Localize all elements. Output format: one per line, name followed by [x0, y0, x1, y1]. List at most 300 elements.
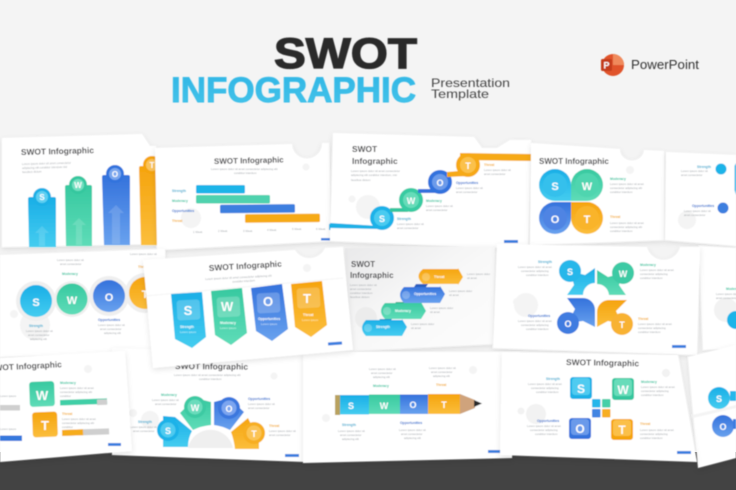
button — [321, 238, 330, 240]
text T with bar: curabitur — [62, 425, 73, 429]
slide: list circles (bottom right) — [688, 345, 736, 468]
slide: far right panel — [699, 246, 736, 350]
arrow Moderacy: sit amet — [430, 310, 440, 314]
bar T: T — [150, 161, 155, 170]
slide: gray arrow steps — [345, 246, 495, 351]
petal T: T — [584, 214, 591, 226]
timeline bars — [196, 185, 320, 223]
slide description: Lorem ipsum dolor sit amet consectetur adipiscing elit — [174, 373, 241, 377]
subtitle: Presentation Template: Template — [431, 87, 489, 101]
center small squares — [592, 399, 610, 418]
subtitle: Presentation Template — [431, 76, 510, 101]
bottom captions: amet consectetur — [401, 432, 423, 436]
slide description: faucibus dictum — [351, 178, 371, 182]
captions: Lorem ipsum dolor sit — [269, 429, 296, 433]
slide description: Lorem ipsum dolor sit — [350, 283, 377, 287]
button — [285, 454, 299, 457]
slide description: Lorem ipsum dolor sit amet consectetur adipiscing elit — [205, 274, 272, 281]
text T with bar — [62, 412, 109, 436]
square T — [32, 412, 58, 437]
top captions: amet consectetur — [431, 370, 453, 374]
captions: Lorem ipsum dolor sit amet — [518, 319, 552, 323]
captions: consectetur adipiscing — [521, 269, 549, 273]
banner S: Lorem ipsum — [180, 330, 197, 334]
connector orange-blue — [408, 284, 428, 296]
labels: Lorem ipsum dolor sit — [484, 168, 511, 172]
text W with bar — [60, 381, 107, 405]
segment O — [400, 394, 428, 414]
arrow Moderacy: Lorem ipsum dolor — [430, 306, 453, 310]
captions: Opportunities — [248, 397, 270, 401]
logo: PowerPoint: PowerPoint — [631, 58, 700, 72]
captions: consectetur adipiscing — [638, 326, 666, 330]
labels — [397, 163, 511, 230]
fan O: O — [225, 404, 233, 414]
bar W: W — [74, 181, 82, 190]
bottom captions: Lorem ipsum dolor sit — [98, 323, 125, 327]
pencil graphic — [335, 394, 482, 415]
captions: curabitur interdum — [536, 390, 559, 394]
ribbon S — [330, 206, 394, 230]
top captions — [57, 252, 157, 276]
slide: puzzle squares — [500, 352, 697, 462]
slide description: Lorem ipsum dolor sit amet consectetur — [22, 161, 71, 166]
bottom captions: adipiscing elit — [30, 337, 47, 341]
piece S: S — [567, 267, 573, 277]
title: SWOT: SWOT — [274, 30, 417, 78]
square O: O — [575, 422, 585, 436]
petal labels: Threat — [610, 215, 621, 219]
timeline ticks: 1 Week — [193, 230, 203, 234]
top captions: adipiscing elit — [373, 375, 390, 379]
captions: consectetur adipiscing — [530, 428, 558, 432]
banner T: Lorem ipsum — [302, 318, 319, 322]
logo: PowerPoint: P — [604, 60, 610, 70]
top captions: Threat — [436, 383, 447, 387]
labels: amet consectetur — [456, 190, 478, 194]
piece T — [597, 300, 633, 335]
bar S — [28, 188, 56, 247]
captions: Lorem ipsum dolor sit amet — [528, 382, 562, 386]
slide description: curabitur interdum — [234, 171, 257, 175]
connector green-cyan — [372, 319, 392, 330]
labels: Strength — [397, 217, 411, 221]
top captions — [369, 366, 456, 388]
captions: consectetur adipiscing — [641, 389, 669, 393]
slide: bars chart (top left) — [2, 134, 161, 247]
arrow Opportunities: Lorem ipsum dolor — [449, 289, 472, 293]
petal labels: curabitur interdum — [610, 190, 633, 194]
timeline ticks: 3 Week — [243, 229, 253, 233]
slide description: Lorem ipsum dolor sit amet consectetur — [351, 169, 400, 173]
caption Moderacy — [716, 287, 736, 300]
captions: consectetur adipiscing — [640, 272, 668, 276]
title: INFOGRAPHIC: INFOGRAPHIC — [171, 71, 416, 110]
bottom captions: adipiscing elit — [104, 331, 121, 335]
bottom captions: amet consectetur — [28, 333, 50, 337]
captions: Threat — [269, 424, 280, 428]
slide description — [211, 167, 278, 175]
banner W: Moderacy — [220, 321, 236, 325]
arrow Strength: Strength — [376, 325, 390, 329]
slide: circles row — [0, 249, 165, 357]
slide description — [350, 283, 377, 299]
circle S: S — [716, 394, 722, 404]
banner S: Strength — [180, 325, 194, 329]
piece T: T — [619, 320, 625, 330]
text T with bar: Threat — [62, 412, 73, 416]
ribbon O: O — [436, 178, 444, 188]
pencil graphic: W — [380, 401, 389, 411]
slide description: curabitur interdum — [350, 291, 373, 295]
arrow Strength — [362, 319, 434, 336]
captions: Lorem ipsum dolor sit amet — [518, 265, 552, 269]
pencil graphic: T — [441, 400, 447, 410]
captions — [527, 377, 675, 440]
top captions: Moderacy — [373, 384, 389, 388]
slide description: curabitur interdum — [232, 278, 256, 284]
bottom captions: adipiscing elit — [404, 436, 421, 440]
fan T: T — [251, 429, 257, 439]
row labels: Moderacy — [172, 199, 188, 203]
text W with bar: curabitur — [60, 394, 71, 398]
bottom captions: adipiscing elit — [342, 437, 359, 441]
petal labels: consectetur adipiscing elit — [610, 186, 642, 190]
bottom captions: Lorem ipsum dolor sit — [338, 429, 365, 433]
captions: Moderacy — [641, 380, 657, 384]
text T with bar: consectetur adipiscing elit — [62, 421, 94, 425]
slide: banners (front center) — [143, 247, 353, 368]
captions: Opportunities — [528, 314, 550, 318]
text W with bar: Lorem ipsum dolor sit amet — [60, 386, 94, 390]
banner O: Opportunities — [258, 317, 280, 321]
arrow Opportunities: sit amet — [449, 293, 459, 297]
petal labels — [610, 177, 644, 233]
banner S: S — [184, 303, 193, 318]
labels: amet consectetur — [484, 172, 506, 176]
left fragments: Lorem ipsum — [0, 394, 17, 398]
square T: T — [618, 423, 626, 437]
piece S — [559, 260, 595, 295]
bar T — [139, 156, 161, 245]
petal S: S — [551, 181, 559, 193]
square W — [29, 381, 55, 407]
slide heading: SWOT Infographic — [175, 361, 248, 372]
slide: progress squares (bottom left) — [0, 351, 132, 462]
segment T — [428, 394, 460, 414]
button — [488, 450, 502, 453]
captions: Strength — [538, 260, 552, 264]
square S — [570, 377, 592, 399]
slide heading — [350, 260, 394, 280]
circle O — [89, 276, 129, 316]
labels: amet consectetur — [426, 208, 448, 212]
captions: Lorem ipsum dolor sit amet — [640, 428, 674, 432]
decorative circle — [181, 208, 201, 228]
captions: Lorem ipsum dolor sit amet — [638, 322, 672, 326]
row labels: Opportunities — [172, 209, 194, 213]
captions: curabitur interdum — [535, 432, 558, 436]
captions: curabitur interdum — [640, 436, 663, 440]
slide heading: SWOT Infographic — [21, 145, 94, 157]
captions: Opportunities — [537, 419, 559, 423]
slide: right edge icons — [665, 152, 736, 246]
piece W: W — [619, 269, 628, 279]
top captions: Lorem ipsum dolor sit — [429, 366, 456, 370]
piece W — [597, 262, 634, 295]
captions — [518, 260, 674, 334]
captions: consectetur adipiscing — [531, 386, 559, 390]
arrow Opportunities — [400, 286, 472, 303]
captions: curabitur interdum — [641, 393, 664, 397]
bar W — [65, 176, 92, 246]
fan W — [180, 396, 211, 430]
petal labels: curabitur interdum — [610, 229, 633, 233]
bottom captions: Opportunities — [400, 421, 422, 425]
slide: staircase ribbon — [330, 133, 531, 249]
labels: Lorem ipsum dolor sit — [456, 186, 483, 190]
slide: puzzle cross — [493, 244, 700, 355]
arrow Moderacy — [381, 302, 453, 319]
circle S — [16, 281, 56, 321]
labels: amet consectetur — [397, 226, 419, 230]
fan S — [157, 416, 192, 447]
bottom captions: Strength — [342, 423, 356, 427]
fan W: W — [191, 403, 200, 413]
arrow Threat — [418, 268, 490, 285]
fan O — [214, 397, 244, 430]
item: Strength — [681, 164, 726, 177]
ribbon S: S — [379, 214, 385, 224]
row labels: Threat — [172, 219, 183, 223]
slide: small blue fragment behind — [329, 224, 341, 230]
piece O: O — [564, 319, 572, 329]
square T — [611, 419, 633, 440]
arrow Threat: Threat — [434, 275, 445, 279]
banner W: Lorem ipsum — [220, 326, 237, 330]
square W — [612, 378, 634, 400]
left fragments — [0, 394, 22, 441]
petal labels: Lorem ipsum dolor sit amet — [610, 221, 644, 225]
ribbon T: T — [465, 161, 471, 171]
timeline ticks: 2 Week — [218, 229, 228, 233]
fan S: S — [165, 426, 171, 436]
text W with bar: consectetur adipiscing elit — [60, 390, 92, 394]
button — [504, 240, 518, 243]
captions: amet consectetur — [248, 406, 270, 410]
banner O: Lorem ipsum — [261, 322, 278, 326]
button — [672, 345, 686, 348]
square O — [569, 418, 591, 439]
item: Opportunities: Lorem ipsum dolor sit — [684, 209, 711, 213]
timeline ticks — [193, 227, 326, 234]
bottom captions: Lorem ipsum dolor sit — [26, 329, 53, 333]
bottom captions: amet consectetur — [340, 433, 362, 437]
text T with bar: Lorem ipsum dolor sit amet — [62, 417, 96, 421]
captions: curabitur interdum — [640, 276, 663, 280]
captions: amet consectetur — [155, 402, 177, 406]
captions: Lorem ipsum dolor sit — [248, 402, 275, 406]
segment S — [340, 395, 369, 414]
slide heading: SWOT — [352, 144, 378, 154]
button — [328, 342, 342, 345]
arrow Moderacy: Moderacy — [395, 309, 411, 313]
arrow Threat: Lorem ipsum dolor — [467, 272, 490, 276]
slide: gantt timeline — [155, 143, 331, 250]
captions: consectetur adipiscing — [521, 323, 549, 327]
banner T: Threat — [303, 313, 314, 317]
bar S: S — [39, 193, 45, 202]
slide description: Lorem ipsum dolor sit amet consectetur adipiscing elit — [211, 167, 278, 171]
slide heading: SWOT Infographic — [566, 357, 640, 368]
labels: Lorem ipsum dolor sit — [426, 204, 453, 208]
petal labels: Lorem ipsum dolor sit amet — [610, 182, 644, 186]
arrow Opportunities: Opportunities — [414, 292, 436, 296]
segment W — [369, 394, 400, 414]
slide description: amet consectetur — [350, 287, 372, 291]
timeline ticks: 4 Week — [267, 228, 277, 232]
petal labels: consectetur adipiscing elit — [610, 225, 642, 229]
text W with bar: Moderacy — [60, 381, 76, 385]
banner O — [251, 284, 288, 341]
ribbon W: W — [407, 196, 416, 206]
item: Opportunities: Opportunities — [692, 204, 714, 208]
circle O: O — [719, 422, 727, 432]
captions: consectetur adipiscing — [640, 432, 668, 436]
captions: Lorem ipsum dolor sit amet — [641, 385, 675, 389]
labels: Opportunities — [456, 181, 478, 185]
slide description: adipiscing elit curabitur interdum nisi — [22, 165, 68, 170]
captions: Threat — [638, 317, 649, 321]
square W: W — [617, 383, 629, 397]
square S: S — [577, 382, 585, 396]
top captions: adipiscing elit — [433, 374, 450, 378]
banner W — [211, 288, 247, 345]
slide description — [174, 373, 241, 381]
square W: W — [36, 388, 49, 403]
slide heading: SWOT — [351, 260, 375, 269]
circle W: W — [67, 295, 78, 307]
captions: curabitur interdum — [526, 327, 549, 331]
top captions: amet consectetur — [371, 371, 393, 375]
logo: PowerPoint — [601, 54, 700, 76]
bottom captions: Opportunities — [98, 318, 120, 322]
item: Opportunities: amet consectetur — [684, 213, 706, 217]
slide description — [351, 169, 400, 182]
top captions: amet consectetur — [60, 262, 82, 266]
petal O: O — [551, 214, 560, 226]
bottom captions — [338, 421, 426, 441]
captions: Lorem ipsum dolor sit — [130, 425, 157, 429]
ribbon T — [447, 153, 531, 177]
captions: Moderacy — [161, 393, 177, 397]
slide description: faucibus dictum — [350, 295, 370, 299]
item: Strength: Lorem ipsum dolor sit — [681, 169, 708, 173]
row labels — [172, 189, 194, 223]
left fragments: Lorem ipsum — [0, 427, 17, 431]
circle O: O — [105, 292, 114, 304]
top captions: Threat — [138, 265, 149, 269]
labels: Moderacy — [426, 199, 442, 203]
arrow Strength: sit amet — [411, 326, 421, 330]
button — [108, 443, 121, 446]
slide description: adipiscing elit curabitur interdum, nisi — [351, 173, 397, 177]
dark bottom band — [0, 452, 736, 490]
slide heading: SWOT Infographic — [214, 155, 284, 166]
circle S: S — [32, 297, 40, 309]
slide heading: Infographic — [350, 271, 394, 280]
square T: T — [41, 418, 49, 433]
banner T — [291, 281, 327, 337]
subtitle: Presentation Template: Presentation — [431, 76, 510, 90]
captions: Lorem ipsum dolor sit — [152, 398, 179, 402]
slide: pencil — [303, 352, 520, 463]
slide description: curabitur interdum — [199, 377, 222, 381]
slide heading: Infographic — [352, 156, 398, 166]
slide description — [22, 161, 71, 174]
slide heading — [352, 144, 398, 166]
circle T: T — [142, 289, 149, 301]
item: Opportunities — [684, 202, 728, 217]
bottom captions: amet consectetur — [100, 327, 122, 331]
bottom captions: Strength — [29, 324, 43, 328]
captions: Strength — [138, 420, 152, 424]
connector blue-green — [388, 302, 410, 313]
bottom captions: Lorem ipsum dolor sit — [399, 428, 426, 432]
top captions: Moderacy — [62, 272, 78, 276]
banner S — [171, 292, 206, 348]
banner T: T — [303, 291, 311, 306]
captions: Lorem ipsum dolor sit amet — [527, 424, 561, 428]
fan T — [231, 418, 265, 449]
captions: Strength — [546, 377, 560, 381]
item: Strength: Strength — [697, 165, 711, 169]
slide: four petals — [530, 143, 664, 245]
slide heading: SWOT Infographic — [209, 259, 282, 273]
arrow Strength: Lorem ipsum dolor — [411, 322, 434, 326]
captions: Moderacy — [640, 263, 656, 267]
slide description — [205, 274, 272, 285]
pencil graphic: O — [409, 400, 417, 410]
slide description: faucibus dictum — [22, 169, 42, 174]
labels: Lorem ipsum dolor sit — [397, 222, 424, 226]
slide: half-circle fan (bottom) — [112, 348, 306, 462]
arrow Threat: sit amet — [467, 276, 477, 280]
pencil graphic: S — [348, 401, 354, 411]
circle W — [54, 281, 90, 317]
captions: curabitur interdum — [638, 330, 661, 334]
circle T — [125, 273, 165, 313]
fan hub — [188, 430, 233, 448]
ribbon W — [390, 188, 423, 212]
item: Strength: amet consectetur — [681, 173, 703, 177]
slide heading: SWOT Infographic — [539, 157, 609, 166]
labels: Threat — [484, 163, 495, 167]
bar O — [102, 165, 130, 245]
top captions: Lorem ipsum dolor sit — [130, 252, 157, 256]
petal W: W — [582, 181, 593, 193]
captions: Lorem ipsum dolor sit amet — [640, 268, 674, 272]
row labels: Strength — [172, 189, 186, 193]
piece O — [557, 298, 595, 334]
top captions: Lorem ipsum dolor sit — [57, 258, 84, 262]
captions: amet consectetur — [133, 429, 155, 433]
captions: amet consectetur — [269, 433, 291, 437]
banner O: O — [263, 294, 273, 309]
ribbon O — [418, 170, 452, 194]
captions — [130, 393, 296, 437]
timeline ticks: 5 Week — [292, 227, 302, 231]
